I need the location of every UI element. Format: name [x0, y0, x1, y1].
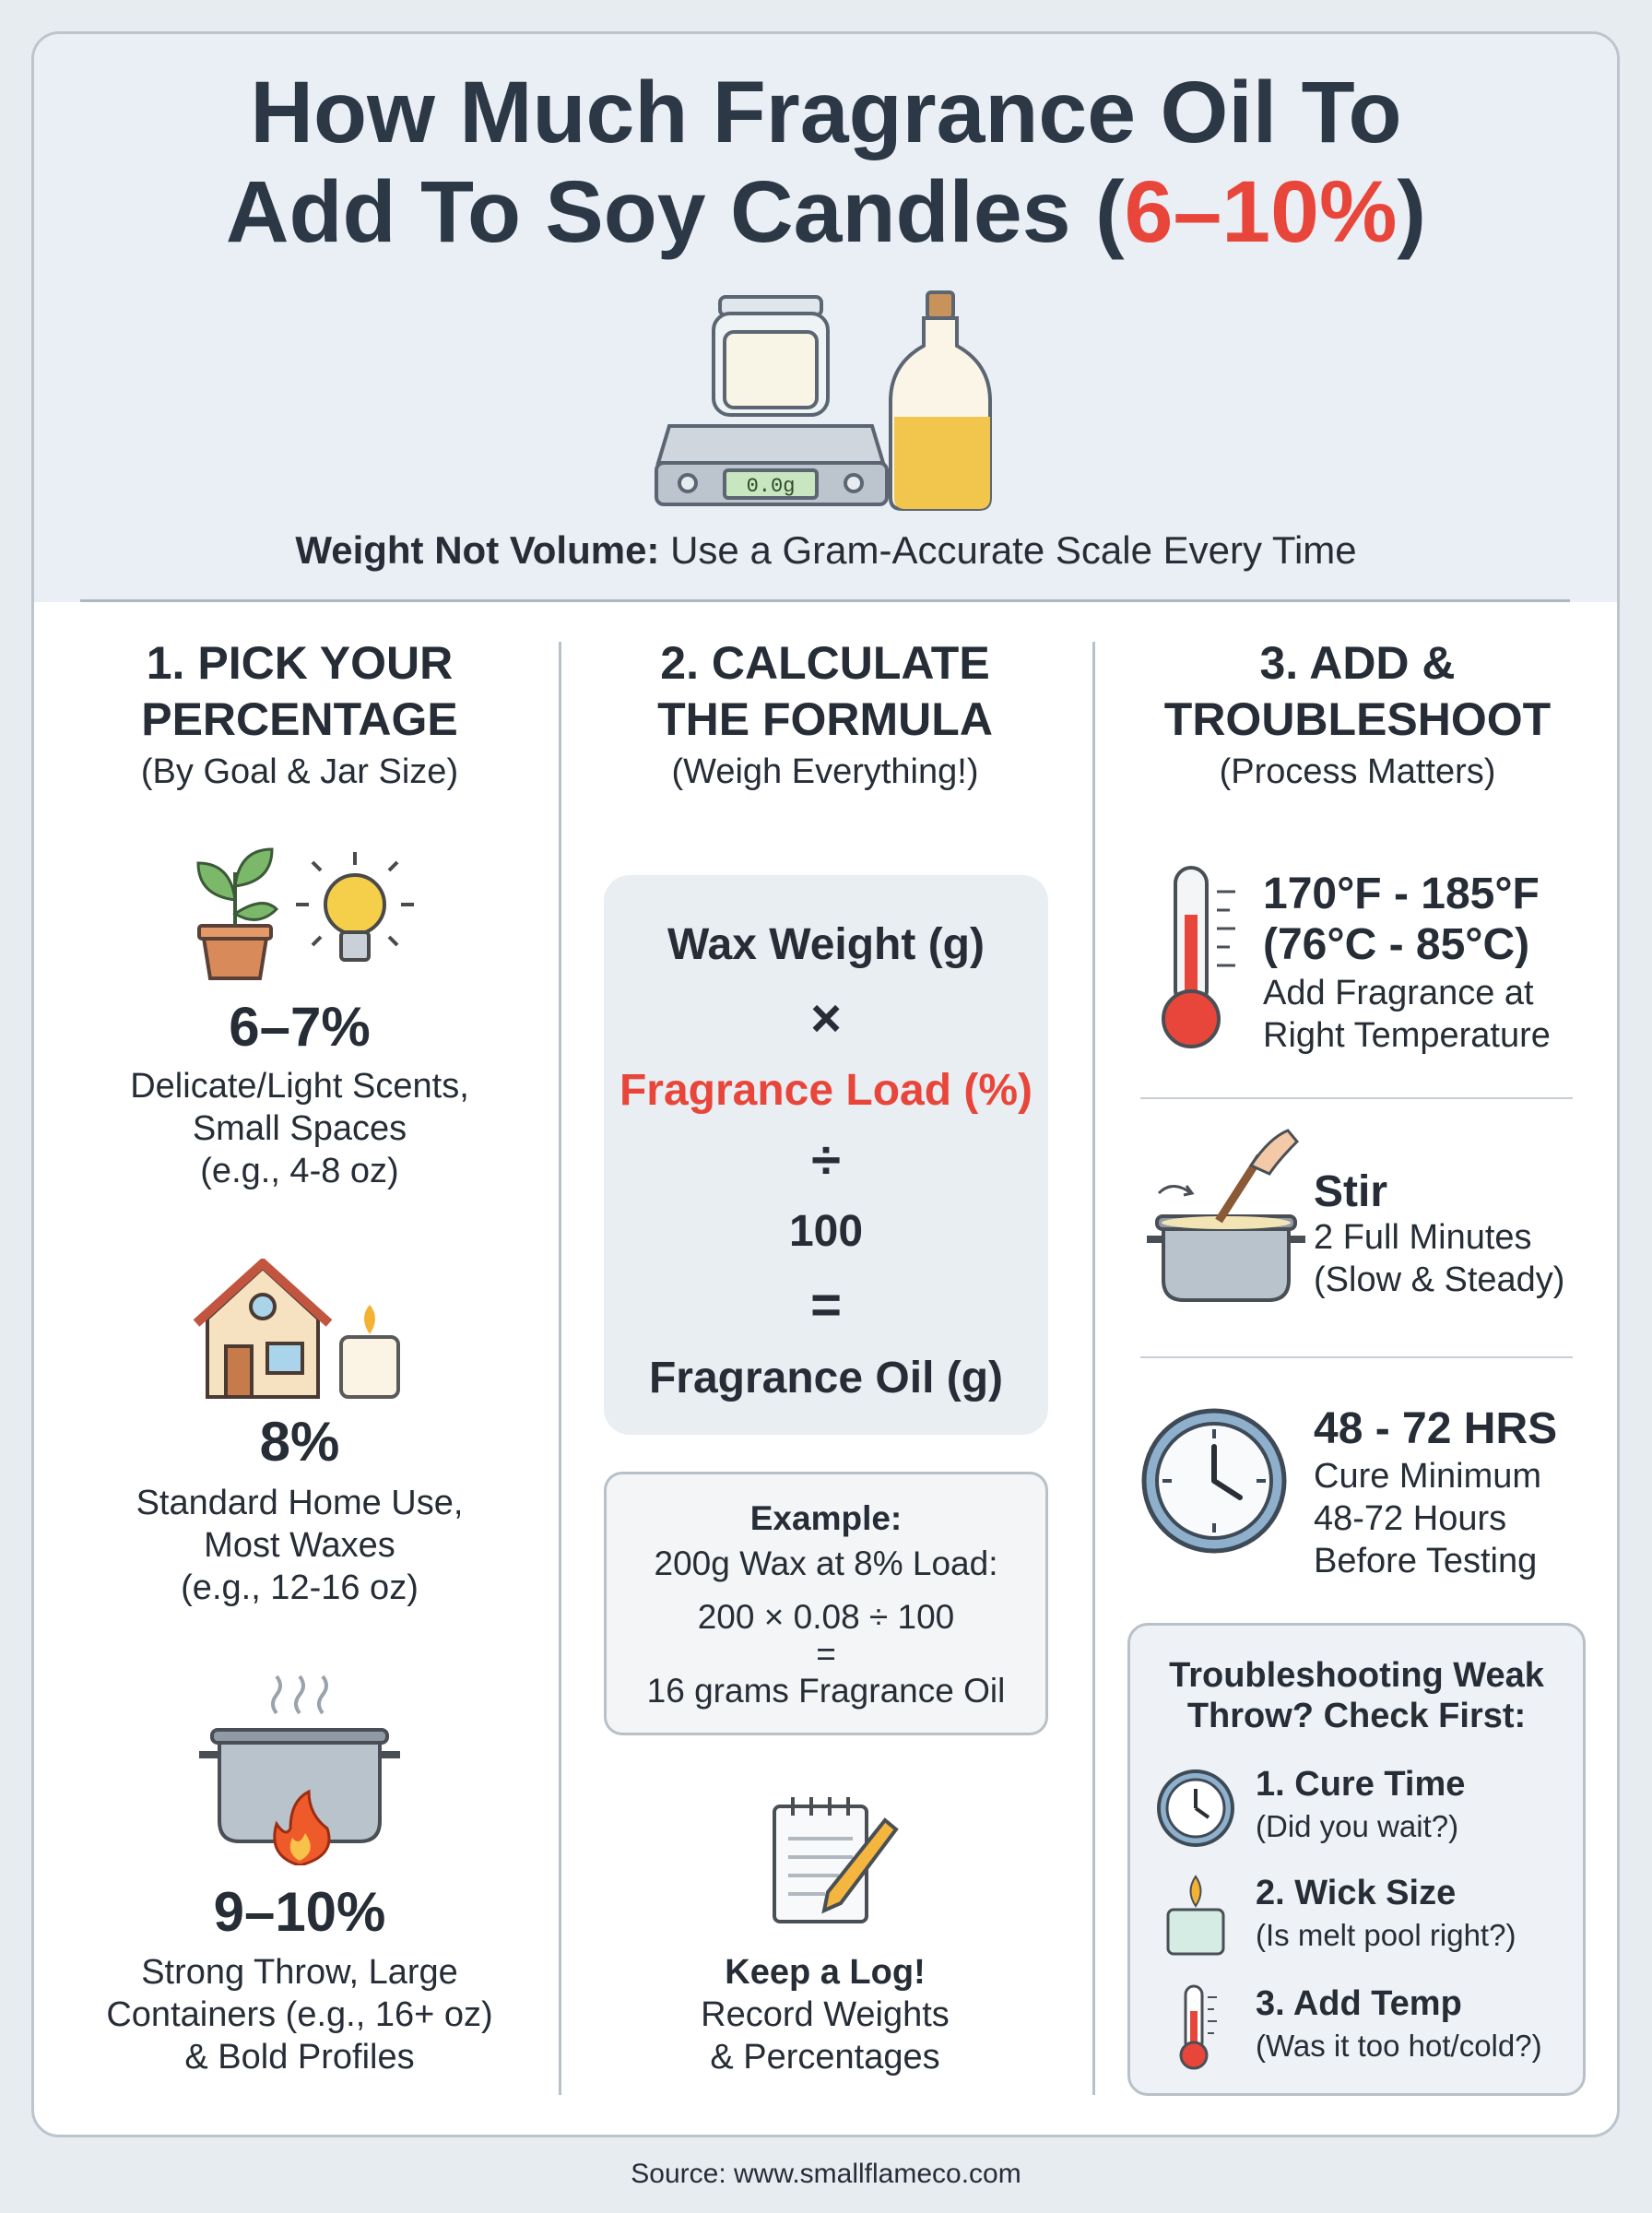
text: cure: 48 - 72 HRS: [1314, 1404, 1557, 1453]
heading: [1164, 637, 1551, 745]
text: cure: Before Testing: [1314, 1542, 1537, 1580]
title: How Much Fragrance Oil To: [250, 64, 1402, 161]
panel: pick percentage: [106, 637, 493, 2077]
text: stir: (Slow & Steady): [1314, 1260, 1564, 1299]
example box: 200 × 0.08 ÷ 100: [698, 1598, 954, 1636]
divider: [80, 599, 1570, 602]
item: add temp: (Was it too hot/cold?): [1256, 2029, 1542, 2063]
text: stir: [1314, 1167, 1564, 1299]
item: add temp: 3. Add Temp: [1256, 1984, 1462, 2023]
subheading: (Weigh Everything!): [671, 752, 978, 791]
text: (e.g., 4-8 oz): [200, 1152, 399, 1190]
formula box: =: [810, 1275, 842, 1335]
text: stir: 2 Full Minutes: [1314, 1218, 1532, 1257]
text: temperature: [1263, 870, 1551, 1055]
heading: 1. PICK YOUR: [147, 637, 453, 689]
troubleshooting box: Troubleshooting Weak: [1169, 1656, 1544, 1695]
text: temperature: Right Temperature: [1263, 1016, 1551, 1055]
text: Standard Home Use,: [136, 1484, 463, 1522]
value 6-7%: 6–7%: [229, 996, 371, 1058]
text: & Bold Profiles: [184, 2038, 415, 2077]
item: add temp: [1180, 1984, 1542, 2069]
text: [136, 1484, 463, 1607]
example box: 16 grams Fragrance Oil: [647, 1672, 1005, 1710]
heading: PERCENTAGE: [141, 693, 458, 745]
title: [226, 64, 1426, 261]
text: keep a log: Record Weights: [701, 1995, 950, 2034]
icon: pot on flame: [199, 1675, 400, 1865]
icon: scale with jar and oil bottle: [655, 290, 992, 511]
text: keep a log: [701, 1953, 950, 2077]
text: Strong Throw, Large: [141, 1953, 458, 1992]
text: Most Waxes: [204, 1526, 395, 1565]
formula box: Fragrance Load (%): [620, 1066, 1032, 1115]
title: Add To Soy Candles (6–10%): [226, 163, 1426, 261]
heading: TROUBLESHOOT: [1164, 693, 1551, 745]
subtitle: Weight Not Volume: Use a Gram-Accurate Scale Every Time: [295, 528, 1357, 572]
icon: thermometer: [1162, 866, 1235, 1048]
formula box: ÷: [811, 1130, 841, 1190]
item: cure time: [1157, 1765, 1465, 1847]
text: temperature: Add Fragrance at: [1263, 974, 1534, 1012]
subheading: (By Goal & Jar Size): [141, 752, 458, 791]
item: wick size: [1167, 1874, 1516, 1955]
formula box: 100: [789, 1207, 863, 1256]
formula box: Wax Weight (g): [667, 920, 985, 969]
footer source: Source: www.smallflameco.com: [631, 2159, 1021, 2189]
value 8%: 8%: [260, 1411, 339, 1473]
icon: stirring pot: [1147, 1129, 1305, 1302]
formula box: [604, 875, 1048, 1435]
icon: plant and bulb: [197, 848, 414, 980]
icon: notepad and pencil: [773, 1797, 899, 1923]
text: [106, 1953, 493, 2077]
text: (e.g., 12-16 oz): [181, 1568, 419, 1607]
text: Delicate/Light Scents,: [130, 1067, 469, 1106]
example box: Example:: [750, 1499, 902, 1537]
text: keep a log: & Percentages: [710, 2038, 940, 2077]
icon: clock: [1141, 1409, 1287, 1553]
formula box: Fragrance Oil (g): [649, 1354, 1003, 1402]
icon: house and candle: [194, 1259, 400, 1399]
heading: [141, 637, 458, 745]
text: [130, 1067, 469, 1190]
troubleshooting box: [1127, 1623, 1586, 2096]
panel: calculate formula: [604, 637, 1048, 2077]
heading: 2. CALCULATE: [660, 637, 990, 689]
text: Small Spaces: [193, 1109, 407, 1148]
text: cure: 48-72 Hours: [1314, 1499, 1506, 1538]
text: cure: [1314, 1404, 1557, 1580]
text: Containers (e.g., 16+ oz): [106, 1995, 493, 2034]
example box: =: [816, 1635, 836, 1673]
item: cure time: 1. Cure Time: [1256, 1765, 1465, 1804]
text: temperature: 170°F - 185°F: [1263, 870, 1540, 918]
heading: [657, 637, 993, 745]
text: stir: Stir: [1314, 1167, 1387, 1216]
example box: [604, 1472, 1048, 1735]
troubleshooting box: Throw? Check First:: [1187, 1697, 1526, 1735]
heading: THE FORMULA: [657, 693, 993, 745]
text: temperature: (76°C - 85°C): [1263, 920, 1529, 969]
panel: add & troubleshoot: [1127, 637, 1586, 2096]
text: keep a log: Keep a Log!: [725, 1953, 926, 1992]
header background: [34, 34, 1622, 602]
text: cure: Cure Minimum: [1314, 1457, 1541, 1496]
icon: scale with jar and oil bottle: 0.0g: [747, 475, 795, 498]
item: wick size: (Is melt pool right?): [1256, 1918, 1516, 1952]
value 9-10%: 9–10%: [214, 1881, 385, 1943]
example box: 200g Wax at 8% Load:: [655, 1544, 997, 1582]
item: wick size: 2. Wick Size: [1256, 1874, 1456, 1912]
subheading: (Process Matters): [1220, 752, 1495, 791]
formula box: ×: [810, 988, 842, 1048]
heading: 3. ADD &: [1259, 637, 1456, 689]
item: cure time: (Did you wait?): [1256, 1809, 1458, 1843]
